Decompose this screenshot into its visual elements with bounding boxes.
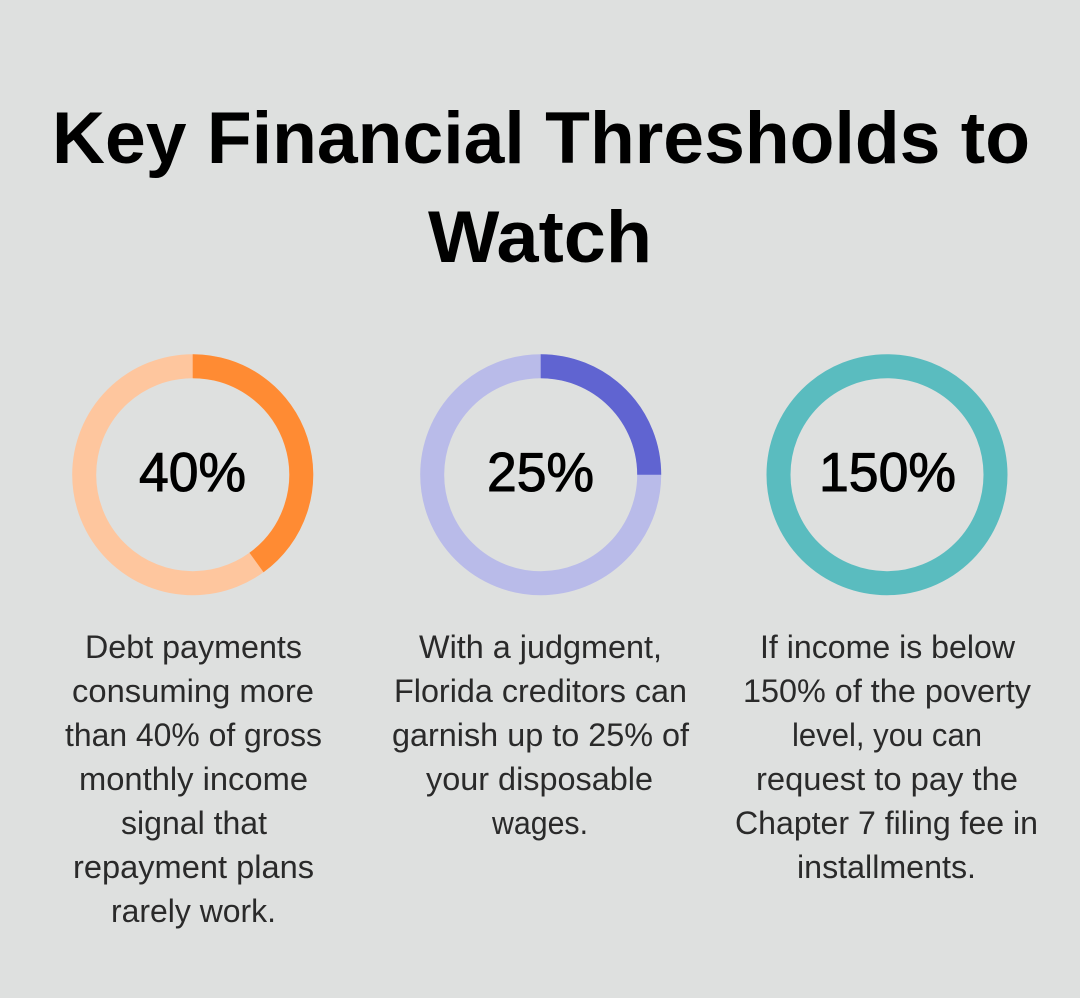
title: Key Financial Thresholds to xyxy=(52,98,1030,179)
description: 25%: garnish up to 25% of xyxy=(392,717,689,753)
donut chart: 40% xyxy=(84,366,301,583)
panel: 25% wage garnishment xyxy=(392,366,689,841)
description: 25%: Florida creditors can xyxy=(394,673,687,709)
description: 150%: 150% of the poverty xyxy=(743,673,1031,709)
title xyxy=(52,98,1030,278)
panel: 150% poverty level xyxy=(735,366,1038,885)
description: 25%: your disposable xyxy=(426,761,653,797)
description: 25%: With a judgment, xyxy=(419,629,662,665)
description: 25%: wages. xyxy=(491,805,588,841)
description: 40%: than 40% of gross xyxy=(65,717,322,753)
description: 40%: repayment plans xyxy=(73,849,314,885)
stat: 150%: 150% xyxy=(819,441,956,503)
description: 150%: level, you can xyxy=(792,717,982,753)
description: 150%: installments. xyxy=(797,849,976,885)
description: 40%: Debt payments xyxy=(85,629,302,665)
donut chart: 25% xyxy=(432,366,649,583)
donut chart: 150% xyxy=(778,366,996,583)
description: 40% xyxy=(65,629,322,929)
description: 40%: signal that xyxy=(121,805,267,841)
panel: 40% debt payments xyxy=(65,366,322,929)
description: 25% xyxy=(392,629,689,841)
description: 150%: If income is below xyxy=(760,629,1016,665)
description: 150%: Chapter 7 filing fee in xyxy=(735,805,1038,841)
description: 40%: rarely work. xyxy=(111,893,276,929)
description: 40%: consuming more xyxy=(72,673,314,709)
title: Watch xyxy=(428,197,652,278)
description: 150% xyxy=(735,629,1038,885)
stat: 40%: 40% xyxy=(139,441,246,503)
description: 40%: monthly income xyxy=(79,761,308,797)
stat: 25%: 25% xyxy=(487,441,594,503)
description: 150%: request to pay the xyxy=(756,761,1018,797)
